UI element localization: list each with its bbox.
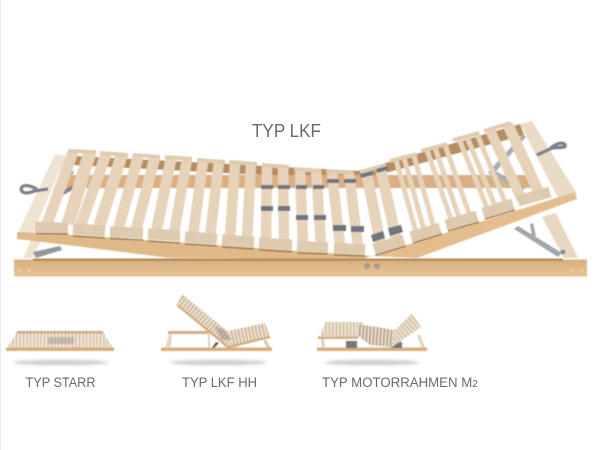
raised foot deck <box>228 323 270 348</box>
grey spring clips on slats <box>261 166 403 242</box>
label: TYP STARR: TYP STARR <box>26 375 96 390</box>
shadow under TYP LKF HH <box>169 360 267 365</box>
centre slat hatch <box>355 336 396 339</box>
centre deck <box>357 324 395 347</box>
slat deck <box>7 332 113 348</box>
rear rail shadows under caps <box>36 210 515 256</box>
base rail <box>6 348 114 351</box>
upper cross rails <box>62 124 530 188</box>
side rail right <box>520 121 577 198</box>
rear legs and hinged supports <box>23 213 578 258</box>
base rail <box>14 258 587 276</box>
strap loop right <box>537 143 565 155</box>
base rail, legs and motors <box>317 335 427 351</box>
product: TYP LKF HH <box>161 294 272 351</box>
back slat hatch <box>177 295 232 346</box>
tilted wood rail left <box>17 232 372 259</box>
shadow under TYP MOTORRAHMEN M2 <box>324 360 420 365</box>
left deck <box>320 322 365 337</box>
side rail left <box>18 154 66 233</box>
slat end caps: top <box>68 123 511 173</box>
slat end caps: bottom <box>35 192 550 250</box>
shadow under TYP STARR <box>13 360 109 365</box>
label: TYP LKF HH: TYP LKF HH <box>182 375 257 390</box>
tilted wood rail <box>177 305 270 347</box>
slat lines <box>5 332 115 348</box>
clips <box>214 326 232 340</box>
base rail and legs <box>161 331 272 351</box>
product: TYP MOTORRAHMEN M2 <box>317 313 427 351</box>
slats: flat section <box>47 152 358 246</box>
upper adjuster struts <box>58 134 526 197</box>
raised back deck <box>177 294 238 347</box>
top rail <box>17 331 103 334</box>
strap loop left <box>21 186 48 193</box>
product: TYP STARR <box>5 331 115 351</box>
tilted wood rail right <box>372 192 577 258</box>
main slatted frame product image <box>14 121 587 276</box>
slats: head section <box>366 125 540 242</box>
clips <box>48 337 74 344</box>
raised foot deck <box>392 313 421 347</box>
hinge rivets <box>365 264 379 268</box>
label: TYP MOTORRAHMEN M2: TYP MOTORRAHMEN M2 <box>322 375 478 390</box>
left slat hatch <box>321 322 362 338</box>
foot slat hatch <box>388 314 422 344</box>
title: TYP LKF: TYP LKF <box>252 120 321 141</box>
foot slat hatch <box>225 329 272 340</box>
